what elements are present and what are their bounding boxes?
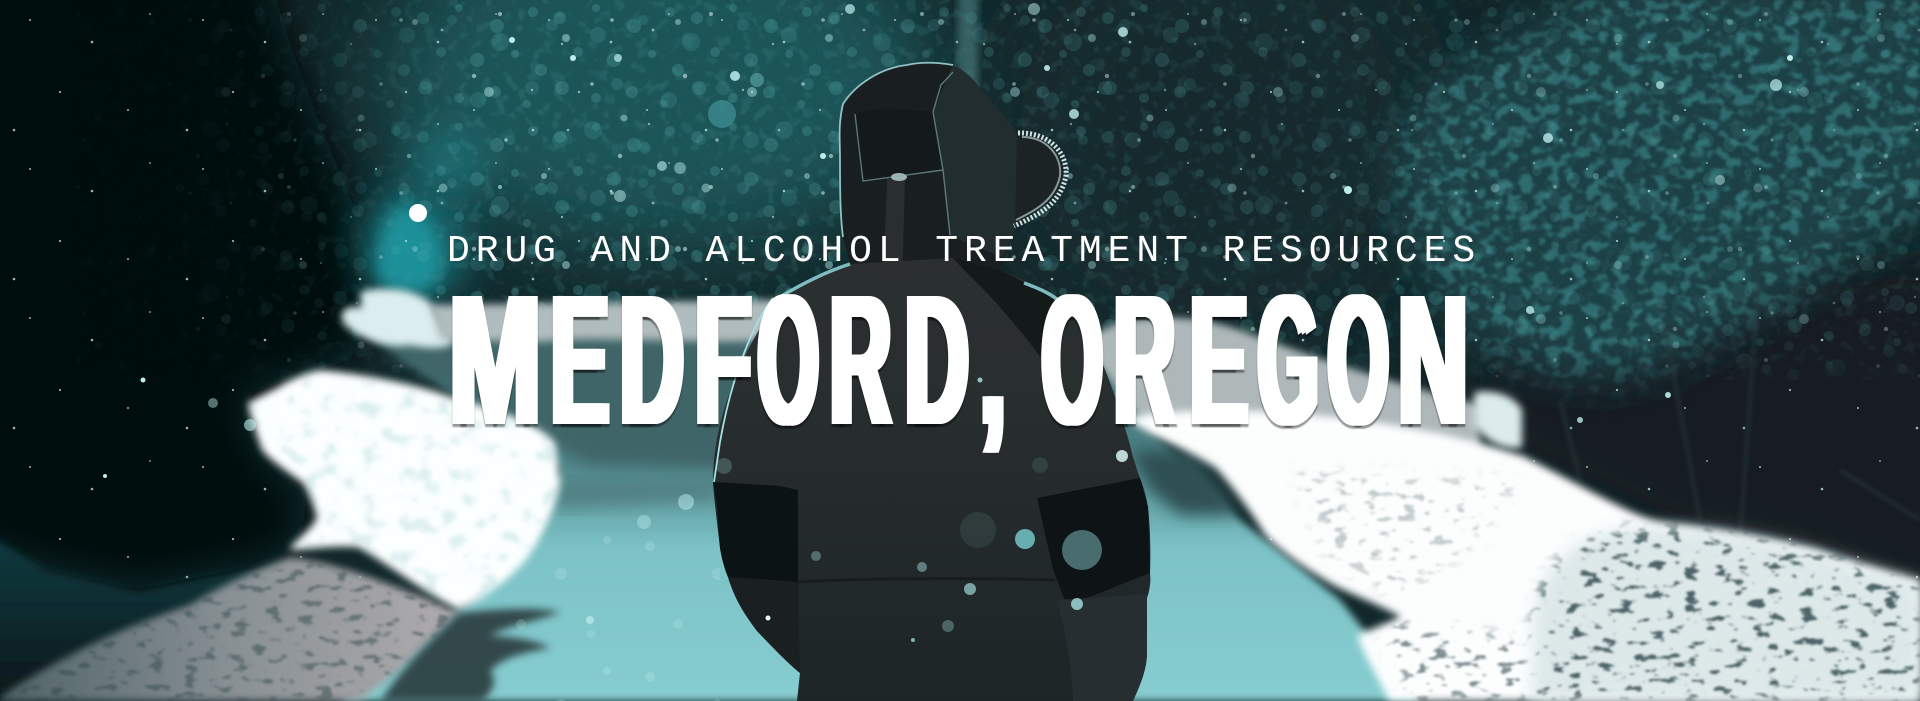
lower left teal ground — [0, 530, 290, 700]
main title: Medford, Oregon: M — [449, 257, 541, 464]
right snow dark footprints — [1296, 466, 1920, 701]
road surface — [340, 335, 1420, 701]
shoulder rim lights — [780, 264, 1058, 300]
main title: Medford, Oregon: E — [551, 257, 609, 464]
left snow bank — [242, 364, 566, 614]
small snow block — [1474, 391, 1522, 448]
road mid band — [555, 480, 720, 510]
main title: Medford, Oregon: O — [758, 257, 818, 464]
main title: Medford, Oregon — [449, 257, 1468, 464]
dark lower-right woods — [1480, 260, 1920, 620]
left sleeve band — [713, 482, 798, 582]
wide teal glow around lamp — [360, 185, 470, 305]
light streak at top centre — [958, 0, 978, 90]
dark left tree mass — [0, 0, 373, 590]
main title: Medford, Oregon: N — [1398, 257, 1468, 464]
main title: Medford, Oregon: G — [1258, 257, 1318, 464]
lamp light — [409, 204, 427, 222]
far road dark patch right — [1130, 450, 1240, 515]
parka silhouette — [713, 63, 1150, 701]
waist cinch — [798, 579, 1055, 582]
hood — [840, 63, 1017, 270]
subtitle: drug and alcohol treatment resources: DRUG AND ALCOHOL TREATMENT RESOURCES — [447, 230, 1481, 273]
right tree foliage mass — [1395, 0, 1920, 378]
right snow speckled drift — [1530, 527, 1920, 701]
main title: Medford, Oregon: R — [1114, 257, 1175, 464]
hood side panel, teal tint — [933, 65, 1017, 258]
fur trim rim light — [1014, 133, 1066, 226]
blurred snow bokeh field — [0, 0, 1920, 380]
toggle on strap — [891, 173, 907, 181]
left snow texture — [252, 376, 558, 596]
main title: Medford, Oregon: , — [980, 257, 1006, 464]
far snow patch — [342, 289, 453, 348]
right forest lower branches — [1560, 260, 1920, 540]
right lower sleeve — [1057, 594, 1147, 701]
main title: Medford, Oregon: R — [830, 257, 891, 464]
dim teal above lamp — [410, 125, 490, 195]
main title: Medford, Oregon: D — [905, 257, 969, 464]
lower left grey snow bank — [0, 557, 459, 701]
far road tone — [380, 335, 760, 470]
grey bank speckle — [20, 560, 450, 700]
bokeh flakes on the figure — [716, 378, 1128, 642]
hood seam lights — [855, 72, 953, 235]
foliage clumps — [1384, 0, 1920, 396]
road shadow lower left — [381, 609, 560, 701]
far right bank behind title — [1085, 317, 1480, 470]
left arm rim light — [714, 298, 773, 482]
road bokeh — [500, 510, 720, 701]
main title: Medford, Oregon: F — [695, 257, 751, 464]
standing figure in a hooded parka, seen from behind — [713, 63, 1150, 701]
main title: Medford, Oregon: D — [620, 257, 684, 464]
individual bokeh flakes — [103, 3, 1793, 624]
rim light on hood, left — [840, 63, 953, 237]
upper back dark yoke — [953, 258, 1057, 357]
right sleeve band — [1037, 478, 1150, 606]
bright teal glow by lamp — [376, 205, 442, 293]
teal forest glow, upper centre — [380, 0, 940, 250]
hood strap — [883, 179, 905, 289]
right snow bank — [1125, 410, 1920, 701]
main title: Medford, Oregon: O — [1042, 257, 1102, 464]
main title: Medford, Oregon: O — [1328, 257, 1388, 464]
left lower sleeve — [728, 577, 800, 673]
hood flap — [855, 109, 943, 181]
fur trim interior — [1015, 133, 1064, 224]
mid forest tone behind figure — [990, 0, 1430, 350]
far grey band behind the title — [430, 300, 780, 342]
main title: Medford, Oregon: E — [1190, 257, 1248, 464]
